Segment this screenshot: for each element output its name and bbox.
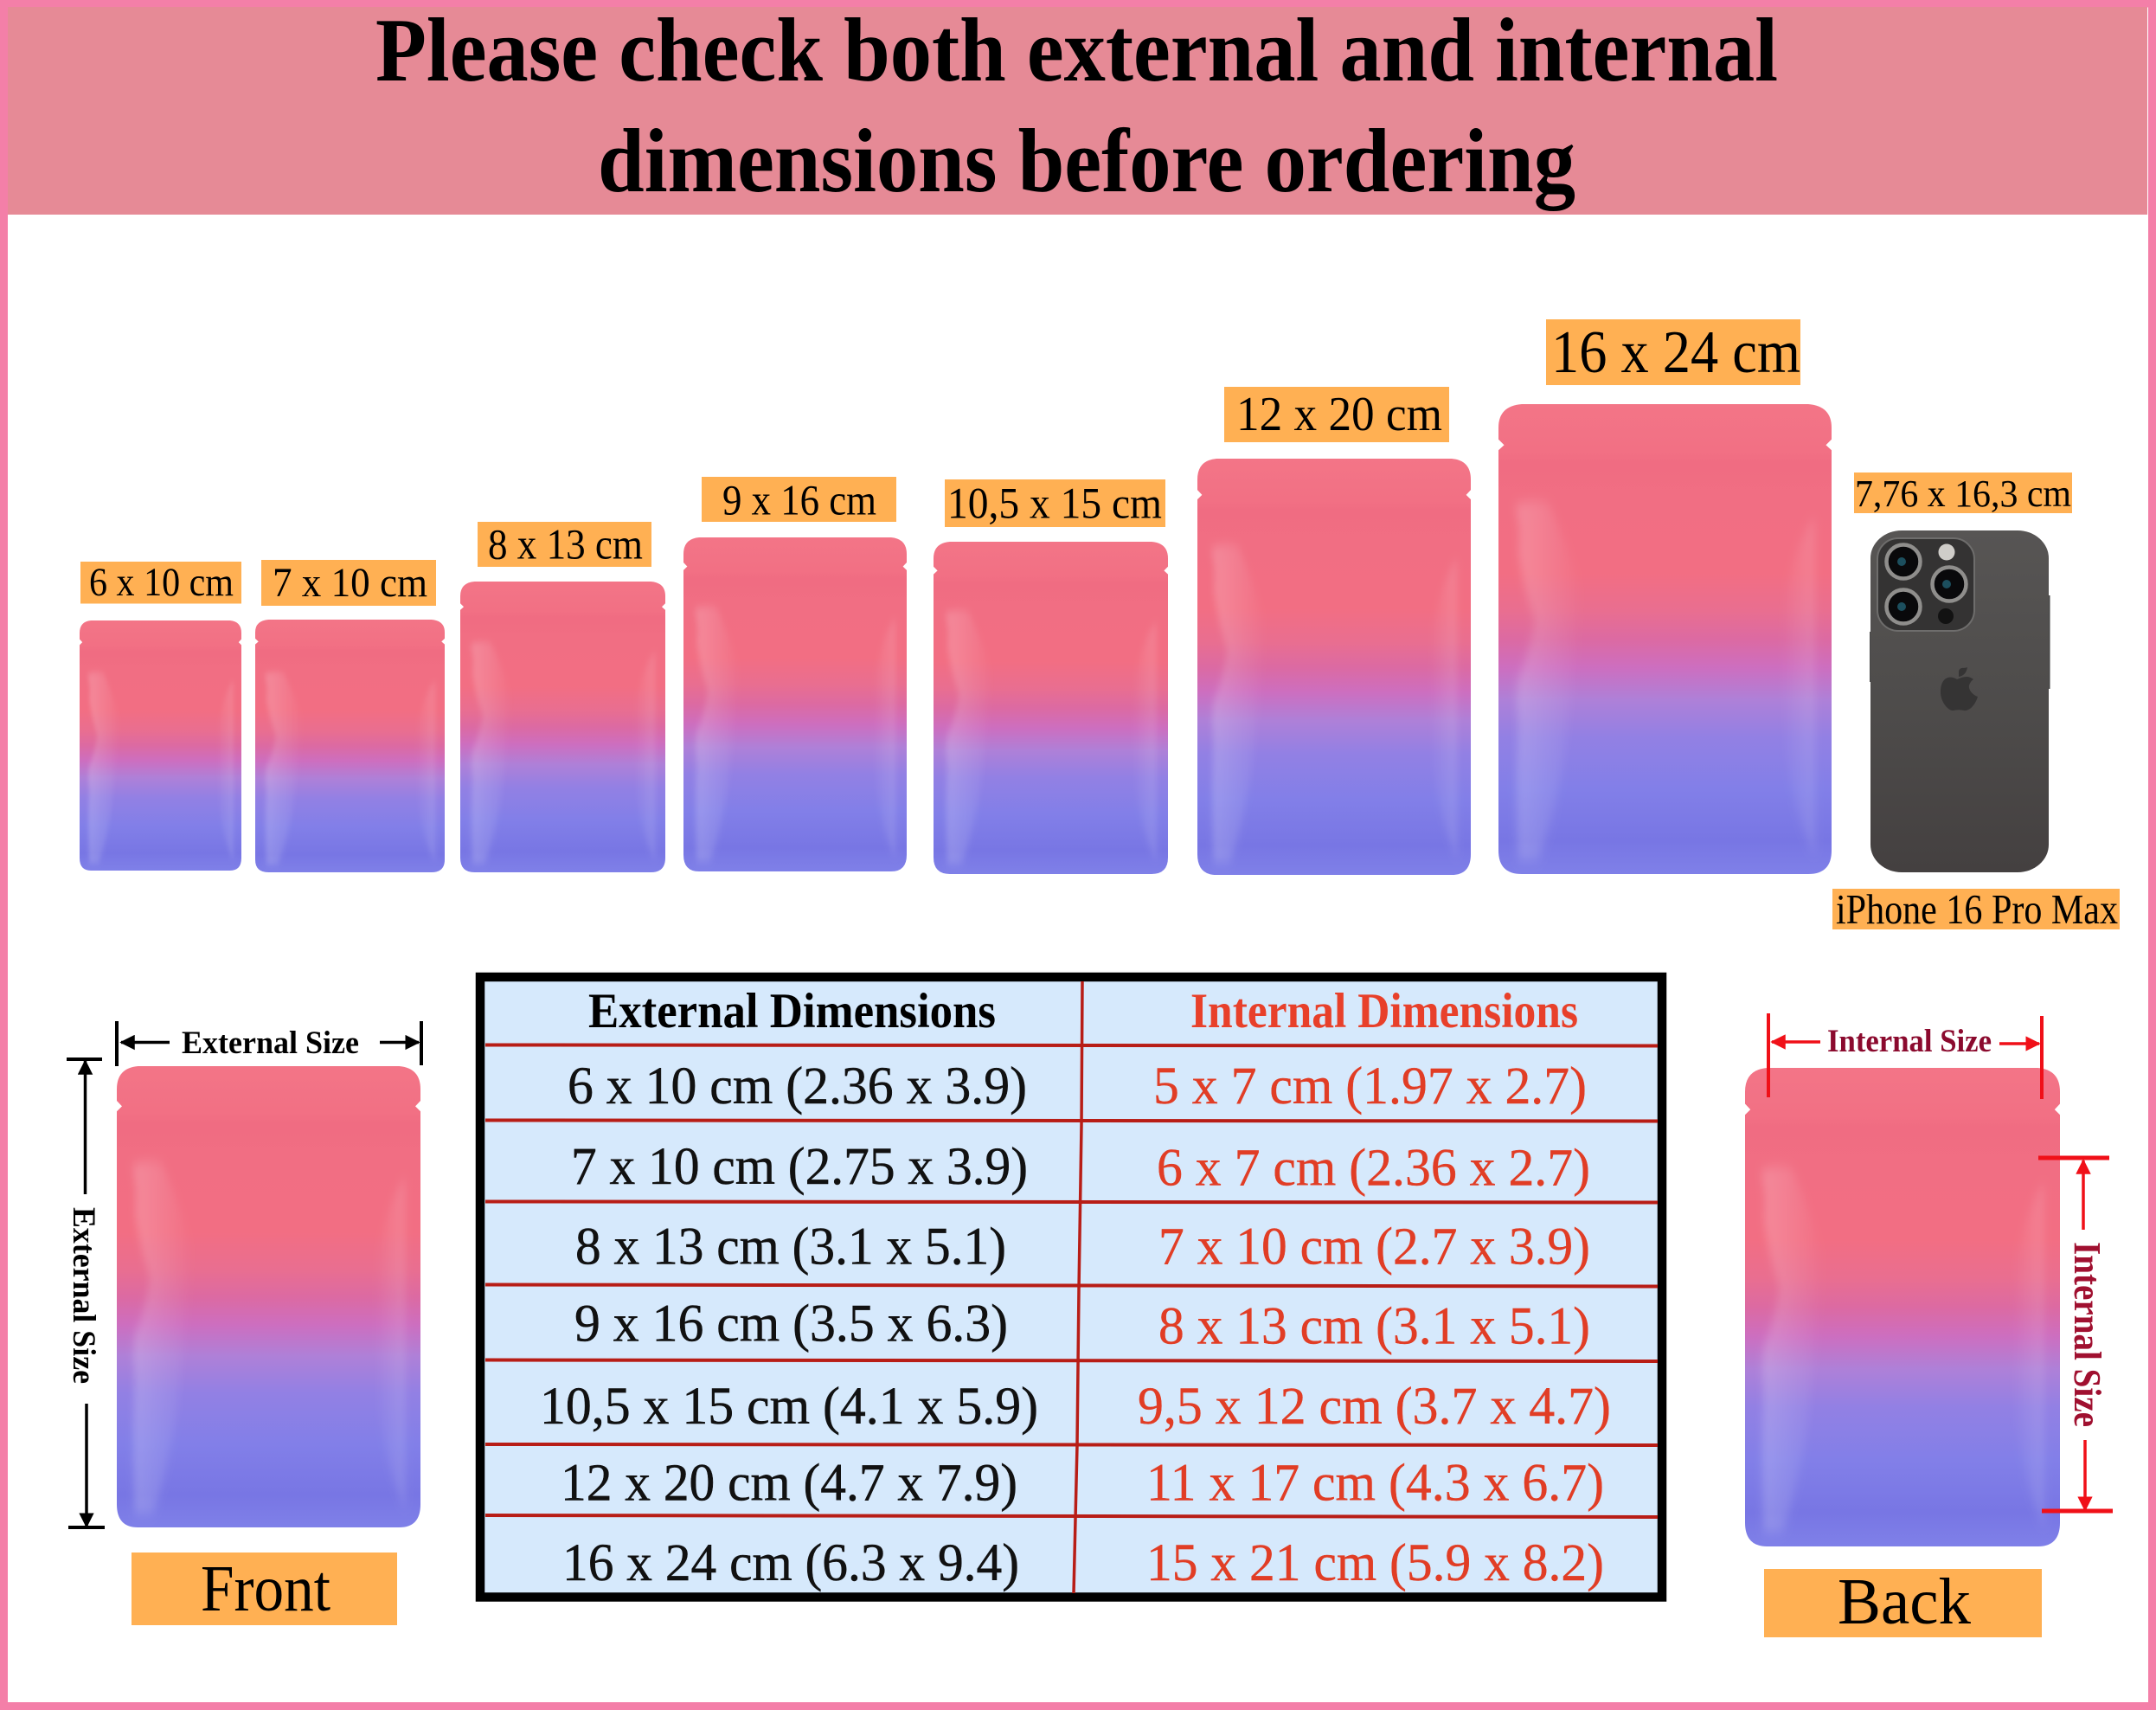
camera bump (1877, 538, 1974, 631)
bag: 12 x 20 cm (1197, 459, 1471, 875)
internal dimensions column: 7 x 10 cm (2.7 x 3.9) (1158, 1218, 1590, 1276)
internal dimensions column: 5 x 7 cm (1.97 x 2.7) (1153, 1058, 1587, 1115)
internal width dimension: Internal Size (1827, 1024, 1992, 1059)
internal dimensions column: 11 x 17 cm (4.3 x 6.7) (1146, 1454, 1604, 1513)
internal dimensions column: 6 x 7 cm (2.36 x 2.7) (1157, 1139, 1590, 1198)
back label (1764, 1565, 2042, 1638)
lens top left (1886, 545, 1921, 578)
external dimensions column: External Dimensions (588, 984, 996, 1038)
bag: 7 x 10 cm (255, 620, 445, 872)
size label: 9 x 16 cm: 9 x 16 cm (722, 476, 876, 524)
front bag diagram (66, 1021, 421, 1625)
back label: Back (1838, 1565, 1971, 1638)
apple logo (1941, 667, 1978, 710)
lens right (1933, 568, 1966, 601)
external height dimension: External Size (66, 1207, 101, 1384)
size label: 6 x 10 cm: 6 x 10 cm (89, 560, 234, 605)
external dimensions column: 7 x 10 cm (2.75 x 3.9) (571, 1138, 1028, 1196)
size label: 8 x 13 cm: 8 x 13 cm (488, 519, 643, 568)
bag: 8 x 13 cm (460, 582, 665, 872)
bag: 10,5 x 15 cm (934, 542, 1168, 874)
title line 1: Please check both external and internal (375, 0, 1778, 100)
size label: 7 x 10 cm: 7 x 10 cm (273, 560, 427, 606)
dimensions table (480, 977, 1662, 1598)
header banner (8, 0, 2147, 215)
internal height dimension (2038, 1158, 2113, 1511)
internal width dimension (1768, 1013, 2042, 1099)
external dimensions column: 16 x 24 cm (6.3 x 9.4) (562, 1534, 1019, 1592)
lidar sensor (1938, 608, 1954, 624)
iPhone 16 Pro Max illustration (1870, 530, 2050, 872)
size label: 12 x 20 cm: 12 x 20 cm (1236, 388, 1442, 441)
external dimensions column: 9 x 16 cm (3.5 x 6.3) (574, 1295, 1008, 1353)
internal dimensions column (1138, 984, 1611, 1592)
front bag (117, 1066, 420, 1527)
external dimensions column: 8 x 13 cm (3.1 x 5.1) (575, 1218, 1006, 1276)
back bag (1745, 1068, 2060, 1546)
internal dimensions column: Internal Dimensions (1190, 984, 1578, 1038)
external dimensions column: 6 x 10 cm (2.36 x 3.9) (568, 1058, 1027, 1115)
internal dimensions column: 9,5 x 12 cm (3.7 x 4.7) (1138, 1378, 1611, 1436)
internal dimensions column: 15 x 21 cm (5.9 x 8.2) (1146, 1534, 1604, 1592)
external width dimension (117, 1021, 421, 1066)
title line 2: dimensions before ordering (598, 110, 1575, 211)
back bag diagram (1745, 1013, 2113, 1638)
external dimensions column (540, 984, 1038, 1592)
internal dimensions column: 8 x 13 cm (3.1 x 5.1) (1158, 1298, 1590, 1355)
internal height dimension: Internal Size (2066, 1242, 2108, 1427)
lens bottom left (1886, 590, 1921, 623)
bag: 16 x 24 cm (1498, 404, 1832, 874)
bag: 9 x 16 cm (683, 537, 907, 871)
external height dimension (66, 1059, 105, 1527)
front label: Front (201, 1552, 330, 1625)
size label: 7,76 x 16,3 cm: 7,76 x 16,3 cm (1855, 472, 2071, 515)
size label: 10,5 x 15 cm: 10,5 x 15 cm (947, 479, 1162, 528)
size label: 16 x 24 cm: 16 x 24 cm (1551, 319, 1800, 386)
device label: iPhone 16 Pro Max: iPhone 16 Pro Max (1836, 885, 2118, 933)
flash (1938, 543, 1955, 561)
external dimensions column: 10,5 x 15 cm (4.1 x 5.9) (540, 1378, 1038, 1436)
bag: 6 x 10 cm (80, 620, 241, 871)
external width dimension: External Size (182, 1025, 359, 1061)
front label (132, 1552, 397, 1625)
external dimensions column: 12 x 20 cm (4.7 x 7.9) (561, 1454, 1017, 1513)
